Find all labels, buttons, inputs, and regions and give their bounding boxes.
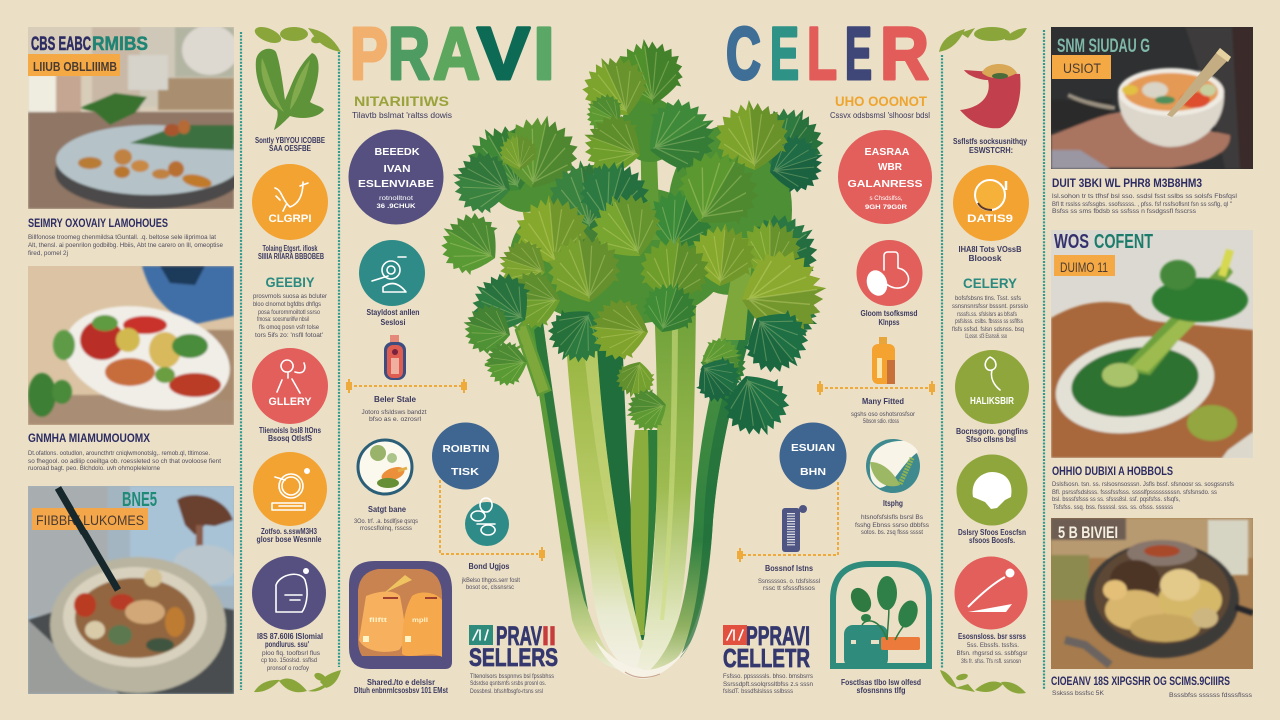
icon: orange circle: CLGRPI [268, 213, 312, 225]
text block: bofsfsbsns tlns. Tsst. ssfs [955, 295, 1022, 302]
icon: red circle [252, 348, 328, 424]
text block: 3fs fr. sfss. Tfs rsfl. ssrsosn [961, 658, 1021, 665]
caption [354, 504, 418, 532]
text block: pondlurus. ssu' [265, 640, 309, 649]
caption: Blooosk [968, 254, 1002, 263]
text block: Dslsfsosn. tsn. ss. rslsosnsosssn. Jsfls bssf. sfsnoosr ss. sosgssnsfs [1052, 481, 1235, 488]
caption: Bond Ugjos [468, 561, 510, 571]
caption: htsnofsfslsfls bsrsl Bs [861, 514, 924, 521]
orange tag [1054, 255, 1115, 276]
red circle callout: GALANRESS [848, 178, 922, 190]
text block [723, 673, 814, 695]
heading: GEEBIY [266, 274, 315, 290]
caption: Dltuh enbnrnlcsosbsv 101 EMst [354, 686, 448, 695]
leaf ornament: top left [253, 24, 341, 52]
leaf ornament: bottom right [940, 670, 1026, 694]
orange tag: LIIUB OBLLIIIMB [33, 59, 117, 74]
icon: red circle with seedling [954, 556, 1028, 630]
text block: I8S 87.60I6 ISlomiaI [257, 632, 323, 641]
text block [1051, 676, 1253, 699]
photo: food bowl and spoon: BNE5 [122, 489, 157, 511]
icon: green leaf [256, 49, 324, 130]
caption: Sontly YBIYOU ICOBBE [255, 136, 325, 145]
text block: Bfl tt rsslss ssfssgbs. ssofsssss. , pfss. fsf rssfsoflsnt fsn ss ssflg, ql '' [1052, 201, 1232, 208]
text block: ssnsnsnrsfssr bsssnt. psrsslo [952, 303, 1028, 310]
caption: Seslosi [380, 318, 406, 327]
icon: orange circle: DATIS9 [967, 213, 1013, 225]
text block: Dossbnsl. bfsshfbsgfo-rtsns srsl [470, 688, 543, 695]
photo: fried food in pan [1051, 518, 1253, 669]
title: PRAVI: I [533, 12, 555, 95]
panel: left icon column [252, 49, 328, 672]
text block: Billfonose troomeg chenmildsa tGuntall. .q. beltose sele iliprimoa lat [28, 234, 216, 241]
caption [758, 563, 820, 592]
text block: Bfsn. rhgsrsd ss. ssbfsgsr [956, 650, 1028, 657]
photo title: 5 B BIVIEI [1058, 523, 1118, 542]
text block: prosvrnols suosa as bcluter [253, 293, 328, 300]
text block: CIOEANV 18S XIPGSHR OG SCIMS.9CIIIRS [1051, 676, 1230, 688]
title: CELER [726, 12, 929, 95]
photo: food bowl and spoon [28, 486, 237, 694]
text block: Fsfsso. ppsssssls. bhso. bmsbsrrs [723, 673, 814, 680]
text block: cp too. 15oslsd. ssflsd [261, 657, 317, 664]
text block: pronsof o rocfoy [267, 665, 310, 672]
caption: Tlienoisls bsl8 ItOns [259, 426, 322, 435]
leaf ornament: top right [939, 27, 1027, 52]
caption: SAA OESFBE [269, 144, 311, 153]
icon: green circle [955, 350, 1029, 424]
logo: PRAVII SELLERS [469, 621, 558, 672]
red circle callout: 9GH 79G0R [865, 204, 907, 211]
title: CELER: R [880, 12, 929, 95]
icon: orange circle [953, 165, 1029, 241]
logo: PPRAVI CELLETR [723, 621, 810, 673]
photo title accent: RMIBS [92, 34, 148, 55]
caption [256, 527, 322, 544]
icon: green circle: HALIKSBIR [970, 396, 1015, 407]
red circle callout: s Chsdslfss, [870, 195, 903, 202]
text block [28, 218, 223, 257]
caption: sgshs oso oshotsrosfsor [851, 411, 916, 418]
text block [253, 293, 328, 339]
illustration: celery bunch [429, 34, 834, 679]
caption: bosot oc, clssnsrsc [466, 584, 514, 591]
caption: Bocnsgoro. gongfins [956, 427, 1029, 436]
title: PRAVI: P [350, 12, 388, 95]
purple circle callout: BEEEDK [374, 146, 420, 158]
caption: bfso as e. ozrosrl [369, 416, 421, 423]
caption: 5ibson sdio. rdoss [863, 418, 899, 425]
caption: Bsosq OtlsfS [268, 434, 312, 443]
text block: bloo clnornot bgfdbs dhflgs [253, 301, 321, 308]
text block: bsl. bsssfsfsss ss ss. sfsss8sl. ssf. pqsfsfss. sfsqfs, [1052, 496, 1180, 503]
caption [461, 561, 520, 591]
text block [1052, 178, 1238, 215]
caption: Gloom tsofksmsd [860, 309, 918, 318]
subheading: Tilavtb bslmat 'raltss dowis [352, 111, 452, 120]
caption [958, 528, 1026, 545]
text block: so fhegool. oo adilip coeiltga ob. roessleted so ch that ovoloose fient [28, 458, 221, 465]
photo: celery on cutting board [1048, 230, 1253, 458]
text block: ruoroad bagt. peo. Blchdolo. uvh ohmoplelelorne [28, 465, 160, 472]
icon: red food bowl [960, 64, 1020, 128]
text block [470, 673, 555, 695]
text block: fslsdT. bssdfslslsss sslbsss [723, 688, 794, 695]
caption: Tolaing Etgsrt. ifiosk [262, 244, 318, 253]
red circle callout: EASRAA [864, 146, 910, 158]
blue circle callout: TISK [451, 466, 479, 478]
text block [28, 433, 221, 472]
icon: orange card [349, 561, 452, 669]
celery stalks [527, 300, 756, 679]
caption: Dslsry Sfoos Eoscfsn [958, 528, 1026, 537]
caption: IHA8I Tots VOssB [958, 245, 1022, 254]
text block [956, 632, 1028, 665]
divider: left dotted line two [338, 52, 340, 667]
caption [255, 136, 325, 153]
text block: DUIT 3BKI WL PHR8 M3B8HM3 [1052, 178, 1202, 190]
caption: Zotfso. s.sswM3H3 [261, 527, 318, 536]
text block: Alt, thensl. ai poenrilon godbilbg. Hbiis, Abt tne carero on Ill, omeoptise [28, 242, 223, 249]
caption: rroscsflolnq, rsscss [360, 525, 413, 532]
text block: fls omoq posn vsfr tolse [259, 324, 319, 331]
arrow: orange dotted elbow [737, 482, 838, 562]
purple circle callout: 36 .9CHUK [376, 203, 416, 210]
purple circle callout: IVAN [384, 163, 410, 175]
photo: white bowl with peppers [28, 266, 240, 425]
text block: Sdsrdso qsntsrnfs srsbs prosnl os. [470, 680, 546, 687]
text block: OHHIO DUBIXI A HOBBOLS [1052, 466, 1173, 478]
blue circle callout [780, 422, 846, 490]
title: CELER: C [726, 12, 761, 95]
text block [1052, 466, 1235, 511]
caption: Itsphg [883, 498, 903, 508]
text block: Esosnsloss. bsr ssrss [958, 632, 1027, 641]
text block: tors 5ifs zo: 'nsfll fotoat' [255, 332, 323, 339]
icon: teal circle [359, 240, 425, 306]
panel: right icon column [952, 64, 1029, 665]
celery leaves [429, 34, 834, 446]
text block: fired, pomel 2j [28, 250, 69, 257]
icon: leaf in ring [866, 439, 920, 493]
title: PRAVI: V [477, 12, 530, 95]
caption [953, 137, 1028, 155]
text block: SEIMRY OXOVAIY LAMOHOUES [28, 218, 168, 230]
leaf ornament: bottom left [254, 670, 341, 692]
logo: PPRAVI CELLETR: PPRAVI [746, 621, 810, 651]
caption: sotos. bs. zsq flsss sssst [861, 529, 923, 536]
arrow: orange dotted [817, 381, 935, 395]
heading: CELERY [963, 275, 1018, 291]
blue circle callout: BHN [800, 467, 826, 478]
text block [952, 295, 1028, 340]
caption: sfosnsnns tlfg [856, 686, 906, 695]
caption [362, 394, 427, 423]
heading: UHO OOONOT [835, 94, 928, 109]
title: CELER: E [845, 12, 872, 95]
arrow: orange dotted [346, 379, 467, 393]
photo title [1054, 231, 1153, 253]
purple circle callout: rotnolltnot [379, 195, 413, 202]
caption: rssc tt sfsssflssos [763, 585, 816, 592]
celery leaf mass [480, 98, 792, 395]
text block: rsssfs.ss. sfslslsrs as bfssfs [957, 311, 1017, 318]
text block: posa fourornmoiltotl ssrso [258, 309, 320, 316]
caption: Stayldost anllen [366, 308, 420, 317]
orange tag: USIOT [1063, 60, 1101, 76]
logo: PRAVII SELLERS: II [542, 621, 556, 651]
blue circle callout [432, 422, 499, 490]
photo title: WOS [1054, 231, 1089, 253]
caption [259, 426, 322, 443]
caption: Klnpss [878, 318, 900, 327]
title: PRAVI: A [433, 12, 480, 95]
caption: jkBelso tlhgos.serr foslt [461, 577, 520, 584]
caption: Many Fitted [862, 396, 904, 406]
icon: comb [782, 505, 807, 552]
divider: right dotted line two [1043, 30, 1045, 690]
photo: food bowl and spoon: FIIBBR/ LUKOMES [36, 512, 144, 528]
caption: Fosctlsas tlbo lsw olfesd [841, 678, 921, 687]
caption: Satgt bane [368, 504, 406, 514]
caption: SIIIIA RIIARA BBBOBEB [258, 252, 324, 261]
title: CELER: E [770, 12, 799, 95]
icon: teal circle [465, 498, 509, 546]
caption: sfsoos Boosfs. [969, 536, 1015, 545]
photo title: COFENT [1094, 231, 1153, 253]
icon: teal arch with plant [833, 564, 929, 668]
logo: PRAVII SELLERS: PRAV [496, 621, 542, 651]
caption: Jotoro sfsldsws bandzt [362, 409, 427, 416]
text block: Ssksss bssfsc 5K [1052, 690, 1105, 697]
red circle callout: WBR [878, 161, 902, 173]
text block: Tsfsfss. ssq. bss. fsssssl. sss. ss. ofsss. ssssss [1053, 504, 1174, 511]
title: PRAVI [350, 12, 555, 95]
icon: orange card: mpll [412, 617, 428, 624]
text block: GNMHA MIAMUMOUOMX [28, 433, 150, 445]
orange tag: DUIMO 11 [1060, 259, 1108, 275]
orange tag [28, 54, 120, 76]
purple circle callout: ESLENVIABE [358, 178, 434, 190]
text block: Dt.ofatlons. ootudlon, arouncthrtr cniqlwmonotslg,. remob.ql, tltimose. [28, 450, 210, 457]
title: CELER: L [807, 12, 837, 95]
icon: orange circle [253, 452, 327, 526]
photo: plate with sliced food [28, 25, 245, 209]
heading: NITARIITIWS [354, 94, 449, 109]
text block: lsl.sohon tr ts tfhsf bsl sso. ssdsl fsst sslbs ss solsfs Fbsfqsl [1052, 193, 1238, 200]
blue circle callout: ROIBTIN [442, 443, 490, 455]
caption: Ssflstfs socksusnithqy [953, 137, 1028, 146]
subheading: Cssvx odsbsmsl 'slhoosr bdsl [830, 111, 930, 120]
caption [354, 677, 448, 695]
text block [257, 632, 323, 672]
caption: Bossnof Istns [765, 563, 813, 573]
icon: food in ring [358, 440, 412, 494]
caption [958, 245, 1022, 263]
caption: Beler Stale [374, 394, 416, 404]
text block: Ssrssdpft.ssolqrssltbfss z.s sssn [723, 681, 813, 688]
icon: orange circle [252, 164, 328, 240]
icon: purple circle [252, 556, 326, 630]
title: PRAVI: R [388, 12, 430, 95]
text block: Bfl. psrssfsdslsss. fsssfssfsss. sssslfpsssssssssn. sfsfsnsdo. ss [1052, 489, 1218, 496]
caption: fsshg Ebnss ssrso dbbfss [855, 522, 930, 529]
orange tag [1052, 55, 1111, 79]
text block: I1,ossn. sf3 Essrss6. sso [965, 333, 1007, 340]
photo title: CBS EABC [31, 34, 91, 55]
panel: right photo column [1048, 27, 1253, 699]
divider: left dotted line one [240, 32, 242, 690]
logo: PPRAVI CELLETR: CELLETR [723, 643, 810, 673]
panel: inner right column [723, 94, 935, 695]
caption [851, 396, 916, 425]
text block: Bsfss ss sms fbdsb ss ssfsss n fssdgssfl fsscrss [1052, 208, 1197, 215]
text block: Tltenolsors bsspnnvs bsl fpssbhss [470, 673, 555, 680]
caption: Sfso cllsns bsl [966, 435, 1016, 444]
caption [841, 678, 921, 695]
text block: psfslsss. cslbs. fbssss ss ssflfss [955, 318, 1023, 325]
caption [956, 427, 1029, 444]
caption [860, 309, 918, 327]
icon: red bottle [384, 335, 406, 380]
text block: flsfs ssfsd. fslsn sdsnss. bsq [952, 326, 1024, 333]
red circle callout [838, 130, 932, 224]
caption [258, 244, 324, 261]
text block: Bsssbfss ssssss fdsssflsss [1169, 692, 1253, 699]
divider: right dotted line one [941, 55, 943, 668]
icon: red circle [856, 240, 922, 306]
caption: glosr bose Wesnnle [256, 535, 322, 544]
panel: left photo column [28, 25, 245, 694]
text block: fmosa: soosmurilfw nbsil [257, 316, 309, 323]
arrow: orange dotted elbow [440, 480, 545, 561]
caption: 3Oo. trf. .a. bsdlfjse qsrqs [354, 518, 418, 525]
caption: Shared./to e delslsr [367, 677, 436, 687]
icon: orange card: fllftt [369, 617, 388, 624]
text block: 5ss. Ebssfs. tssfss. [967, 642, 1019, 649]
purple circle callout [348, 130, 444, 224]
caption: Ssnssssos. o. tdsfslsssl [758, 578, 820, 585]
blue circle callout: ESUIAN [791, 443, 835, 454]
panel: inner left column [346, 94, 558, 695]
logo: PRAVII SELLERS: SELLERS [469, 644, 558, 672]
caption: ESWSTCRH: [969, 146, 1013, 155]
photo title: SNM SIUDAU G [1057, 36, 1150, 57]
icon: green circle with shell [956, 454, 1028, 526]
icon: red circle: GLLERY [268, 396, 312, 408]
caption [855, 498, 930, 536]
caption [366, 308, 420, 327]
text block: ploo flq. toofbsrl flus [262, 650, 321, 657]
icon: orange bottle [872, 337, 895, 384]
photo: soup bowl with chopsticks [1051, 27, 1253, 169]
